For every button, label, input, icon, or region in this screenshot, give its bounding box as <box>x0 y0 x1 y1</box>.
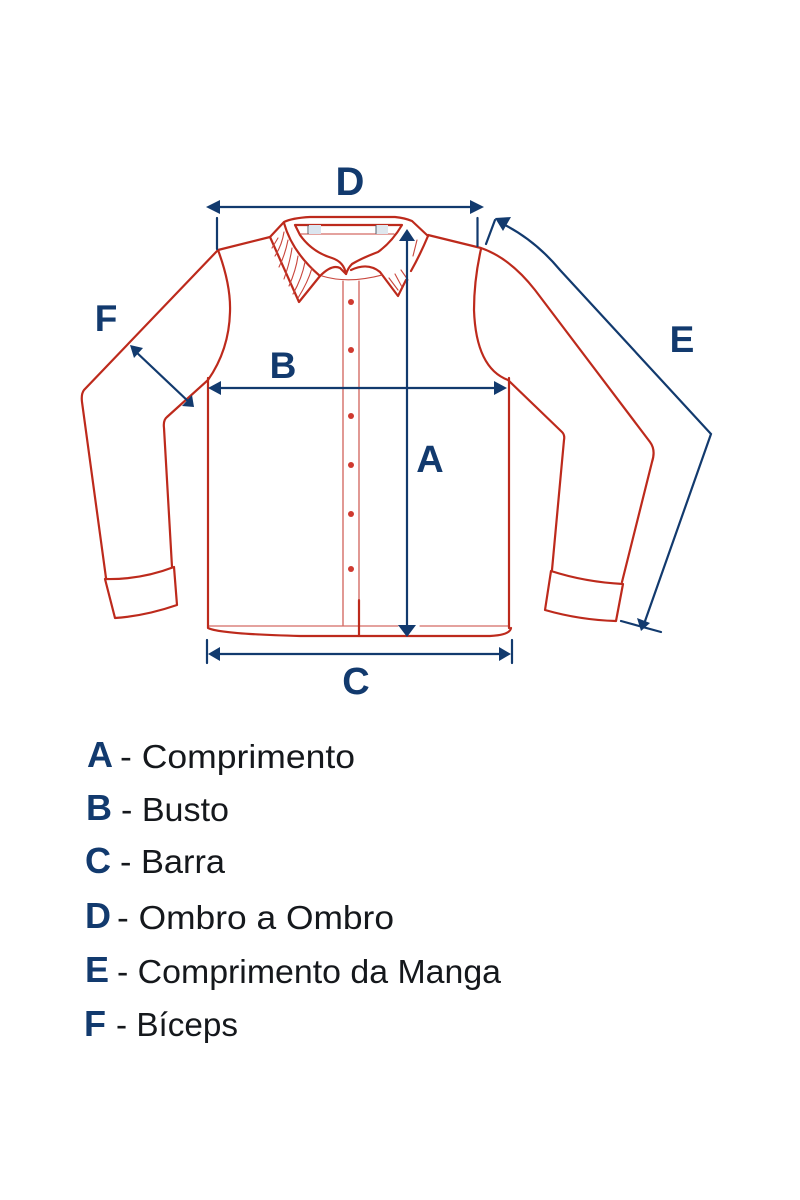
placket <box>343 281 359 625</box>
legend E: E <box>85 949 109 990</box>
legend C <box>85 840 226 881</box>
legend B: - Busto <box>121 791 229 828</box>
right sleeve <box>428 235 654 582</box>
legend A: A <box>87 734 113 775</box>
measure F: biceps: F <box>95 298 117 339</box>
legend C: - Barra <box>120 843 226 880</box>
legend B: B <box>86 787 112 828</box>
shirt illustration <box>82 217 654 636</box>
collar lining detail <box>308 225 388 234</box>
measure C: hem: C <box>342 661 370 703</box>
collar <box>270 217 428 302</box>
measure E: sleeve length: E <box>670 319 694 360</box>
right cuff <box>545 571 623 621</box>
legend F: - Bíceps <box>116 1006 238 1043</box>
measure C: hem <box>207 640 512 703</box>
collar hatching <box>272 232 417 298</box>
measure B: bust: B <box>270 345 296 386</box>
shirt body <box>208 378 511 636</box>
legend D: D <box>85 895 111 936</box>
measure D: shoulder to shoulder <box>206 160 484 249</box>
legend A: - Comprimento <box>120 738 355 775</box>
buttons <box>348 299 354 572</box>
legend C: C <box>85 840 111 881</box>
measure F: biceps <box>95 298 194 407</box>
legend E: - Comprimento da Manga <box>117 953 502 990</box>
left sleeve <box>82 237 270 578</box>
legend F: F <box>84 1003 106 1044</box>
measure E: sleeve length <box>486 217 711 632</box>
legend B <box>86 787 229 828</box>
left cuff <box>105 567 177 618</box>
legend <box>84 734 502 1044</box>
legend D: - Ombro a Ombro <box>117 899 394 936</box>
measure A: length: A <box>416 439 444 481</box>
measure D: shoulder to shoulder: D <box>336 160 364 204</box>
measure A: length <box>398 229 444 637</box>
measure B: bust <box>208 345 507 395</box>
